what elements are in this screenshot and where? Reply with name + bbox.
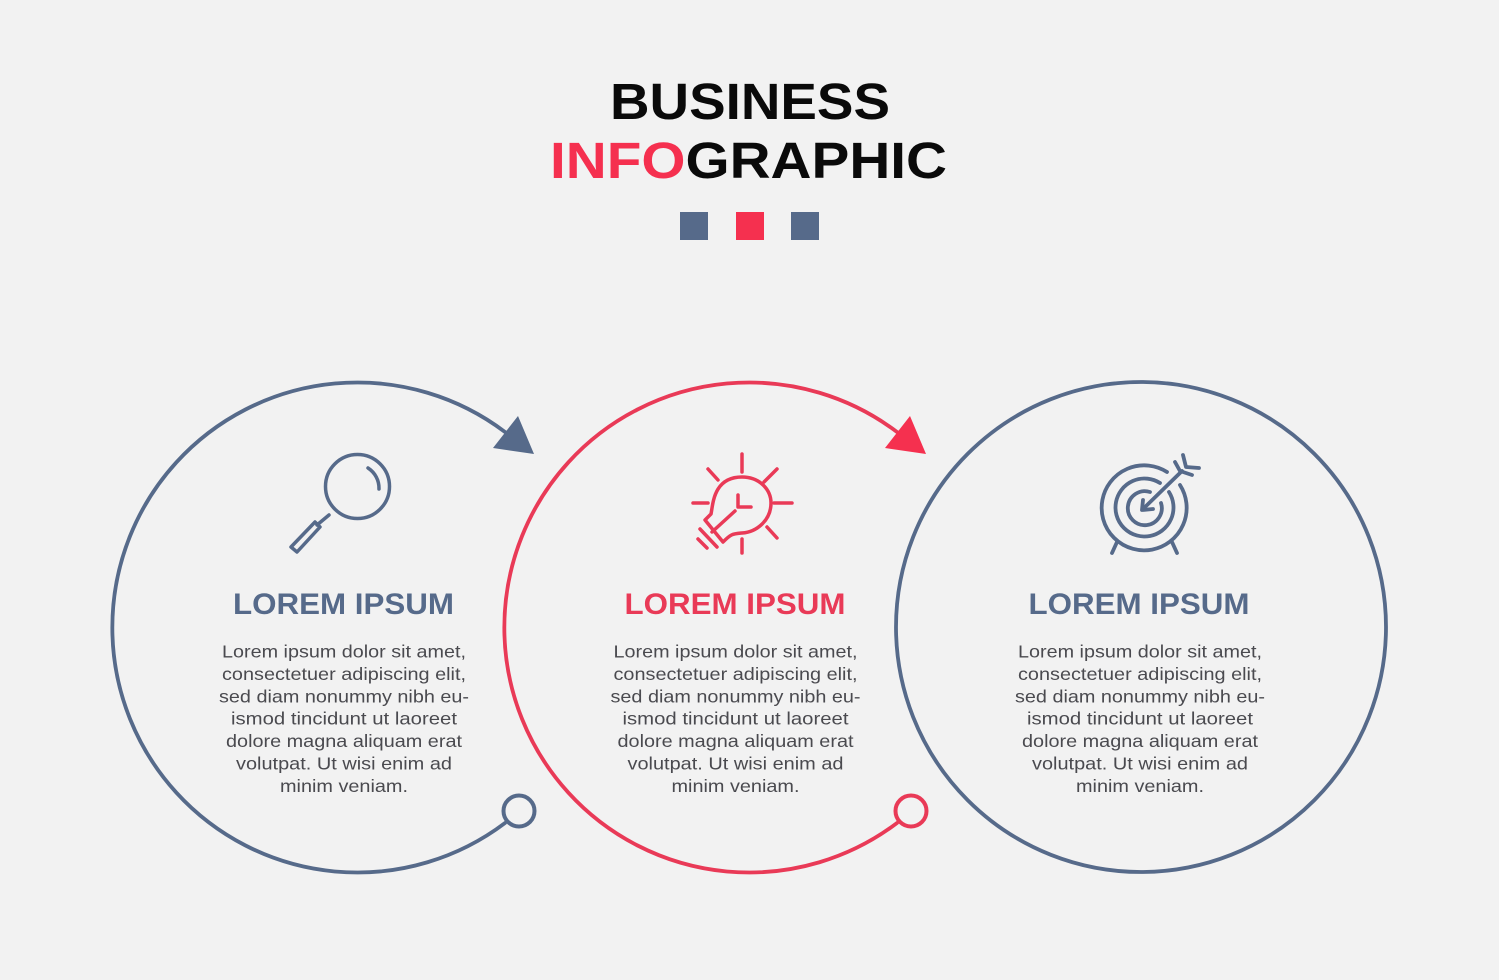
- icon: light bulb with clock: [693, 454, 792, 553]
- text block 1: consectetuer adipiscing elit,: [222, 664, 466, 684]
- heading 3: LOREM IPSUM: [1028, 588, 1250, 621]
- text block 3: volutpat. Ut wisi enim ad: [1032, 754, 1248, 774]
- title: [550, 73, 947, 189]
- heading 1: LOREM IPSUM: [233, 588, 454, 621]
- text block 3: [1015, 642, 1265, 796]
- icon: target with arrow: [1102, 455, 1199, 553]
- circle 2 with arrow: [504, 382, 926, 872]
- text block 1: dolore magna aliquam erat: [226, 731, 462, 751]
- title accent squares: [680, 212, 819, 240]
- text block 2: Lorem ipsum dolor sit amet,: [614, 642, 858, 662]
- title: INFO GRAPHIC: [550, 132, 947, 189]
- text block 2: dolore magna aliquam erat: [618, 731, 854, 751]
- text block 2: sed diam nonummy nibh eu-: [610, 686, 861, 706]
- text block 1: [219, 642, 469, 796]
- text block 1: sed diam nonummy nibh eu-: [219, 686, 469, 706]
- icon: magnifying glass: [291, 454, 390, 552]
- text block 1: minim veniam.: [280, 776, 408, 796]
- title: BUSINESS: [610, 73, 890, 130]
- text block 1: Lorem ipsum dolor sit amet,: [222, 642, 466, 662]
- text block 2: minim veniam.: [672, 776, 800, 796]
- text block 3: consectetuer adipiscing elit,: [1018, 664, 1262, 684]
- heading 2: LOREM IPSUM: [624, 588, 846, 621]
- text block 2: ismod tincidunt ut laoreet: [622, 708, 849, 728]
- text block 2: [610, 642, 861, 796]
- text block 3: dolore magna aliquam erat: [1022, 731, 1258, 751]
- text block 3: Lorem ipsum dolor sit amet,: [1018, 642, 1262, 662]
- text block 2: consectetuer adipiscing elit,: [614, 664, 858, 684]
- text block 1: volutpat. Ut wisi enim ad: [236, 754, 452, 774]
- text block 3: sed diam nonummy nibh eu-: [1015, 686, 1265, 706]
- text block 1: ismod tincidunt ut laoreet: [231, 708, 457, 728]
- circle 1 with arrow: [112, 382, 535, 872]
- text block 2: volutpat. Ut wisi enim ad: [628, 754, 844, 774]
- circle 3: [896, 382, 1386, 872]
- text block 3: ismod tincidunt ut laoreet: [1027, 708, 1253, 728]
- text block 3: minim veniam.: [1076, 776, 1204, 796]
